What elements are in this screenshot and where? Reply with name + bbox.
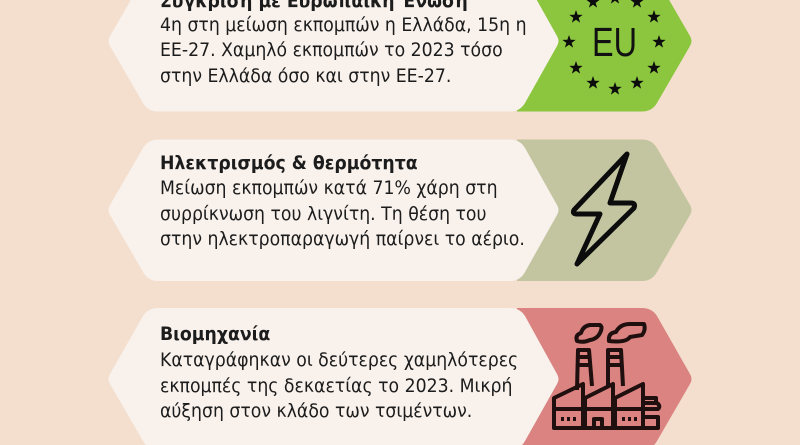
icon: lightning bolt xyxy=(573,154,635,264)
text: industry: αύξηση στον κλάδο των τσιμέντων. xyxy=(160,400,472,422)
panel: industry chevron xyxy=(108,308,692,445)
text: electricity and heat: Μείωση εκπομπών κατά 71% χάρη στη xyxy=(160,177,498,199)
text: EU comparison: 4η στη μείωση εκπομπών η Ελλάδα, 15η η xyxy=(160,14,527,36)
icon: EU stars: EU xyxy=(592,19,637,65)
text: electricity and heat: συρρίκνωση του λιγνίτη. Τη θέση του xyxy=(160,202,487,224)
panel: EU comparison chevron xyxy=(108,0,692,112)
icon: EU stars xyxy=(562,0,666,95)
text: industry xyxy=(160,349,518,422)
icon: factory xyxy=(554,324,659,428)
panel: electricity chevron xyxy=(108,140,692,281)
heading: electricity and heat: Ηλεκτρισμός & θερμότητα xyxy=(160,152,418,174)
text: electricity and heat xyxy=(160,177,525,250)
text: electricity and heat: στην ηλεκτροπαραγωγή παίρνει το αέριο. xyxy=(160,228,525,250)
heading: industry: Βιομηχανία xyxy=(160,323,270,345)
text: EU comparison xyxy=(160,14,527,86)
text: EU comparison: στην Ελλάδα όσο και στην ΕΕ-27. xyxy=(160,64,451,86)
text: industry: εκπομπές της δεκαετίας το 2023. Μικρή xyxy=(160,374,512,396)
text: industry: Καταγράφηκαν οι δεύτερες χαμηλότερες xyxy=(160,349,518,371)
text: EU comparison: ΕΕ-27. Χαμηλό εκπομπών το 2023 τόσο xyxy=(160,39,503,61)
